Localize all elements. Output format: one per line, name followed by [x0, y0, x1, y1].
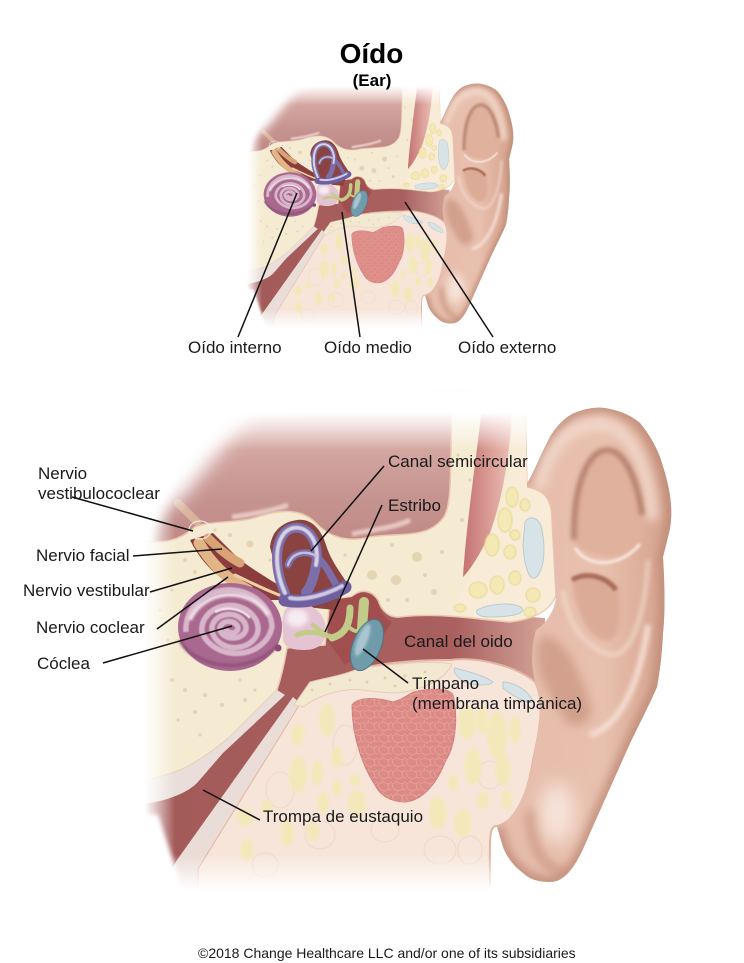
plate pores	[310, 670, 426, 692]
copyright: ©2018 Change Healthcare LLC and/or one of its subsidiaries	[198, 945, 576, 961]
middle ear cavity	[327, 593, 392, 665]
label: nervio coclear: Nervio coclear	[36, 618, 145, 637]
concha	[572, 577, 620, 641]
helix highlight	[538, 424, 652, 520]
leader: cóclea	[103, 626, 232, 663]
title: Oído	[340, 38, 403, 69]
leader: nervio vestibulococlear	[72, 497, 193, 531]
bone pores	[146, 453, 472, 737]
eardrum	[344, 615, 390, 675]
label: oído externo: Oído externo	[458, 338, 556, 357]
leader: nervio facial	[133, 549, 222, 556]
label: cóclea: Cóclea	[37, 654, 90, 673]
label: canal del oido: Canal del oido	[404, 632, 513, 651]
lobe highlight	[539, 783, 575, 843]
leader: trompa de eustaquio	[203, 790, 260, 820]
leader: nervio coclear	[157, 577, 228, 629]
label: oído interno: Oído interno	[188, 338, 282, 357]
label: estribo: Estribo	[388, 496, 441, 515]
pale dura highlights	[232, 505, 410, 534]
pale tissue beside canal	[450, 400, 555, 621]
temporal bone	[135, 400, 556, 782]
nerve bundle	[178, 503, 285, 625]
large ear diagram	[120, 390, 680, 905]
vestibule	[282, 604, 326, 650]
label: canal semicircular: Canal semicircular	[388, 452, 528, 471]
subtitle: (Ear)	[353, 71, 391, 90]
label: tímpano: (membrana timpánica)	[412, 694, 582, 713]
semicircular canals	[277, 528, 345, 601]
leader line: oído medio	[342, 212, 360, 337]
lower cartilage plates	[454, 668, 533, 702]
label: oído medio: Oído medio	[324, 338, 412, 357]
outer ear	[490, 400, 680, 890]
label: nervio vestibulococlear: Nervio	[38, 464, 87, 483]
label: nervio vestibular: Nervio vestibular	[23, 581, 150, 600]
lobule outlines	[252, 725, 502, 877]
label: trompa de eustaquio: Trompa de eustaquio	[263, 807, 423, 826]
label: nervio facial: Nervio facial	[36, 546, 130, 565]
antihelix highlight	[575, 544, 640, 563]
cream plate above tissue	[294, 662, 452, 707]
label: nervio vestibulococlear: vestibulococlear	[38, 484, 160, 503]
leader line: oído interno	[238, 193, 297, 337]
inner ear cavity	[270, 520, 345, 610]
cartilage plates, upper	[477, 518, 544, 617]
leader: tímpano	[363, 649, 408, 683]
lower tissue	[197, 659, 541, 890]
cartilage mass	[352, 689, 456, 802]
leader line: oído externo	[405, 202, 493, 337]
nerve canal	[190, 533, 290, 600]
small ear diagram	[234, 75, 518, 335]
cochlea	[178, 583, 282, 671]
lower fat lobules	[237, 703, 521, 861]
top, left and bottom fade	[120, 390, 530, 905]
leader: nervio vestibular	[150, 568, 232, 592]
brain cavity	[140, 400, 470, 640]
ear canal and eustachian passage	[130, 585, 545, 888]
eustachian tube wall	[160, 697, 300, 890]
label: tímpano: Tímpano	[412, 674, 479, 693]
inner fold highlights	[563, 560, 648, 655]
stapes and ossicles	[297, 602, 364, 638]
pale lip under bone	[135, 690, 285, 805]
upper fat lobules	[454, 487, 540, 617]
antitragus shade	[537, 636, 592, 726]
leader: estribo	[325, 505, 382, 632]
leader: canal semicircular	[311, 466, 384, 551]
scapha	[574, 450, 643, 556]
muscle stripe	[463, 400, 513, 577]
vestibule highlight	[286, 609, 308, 627]
